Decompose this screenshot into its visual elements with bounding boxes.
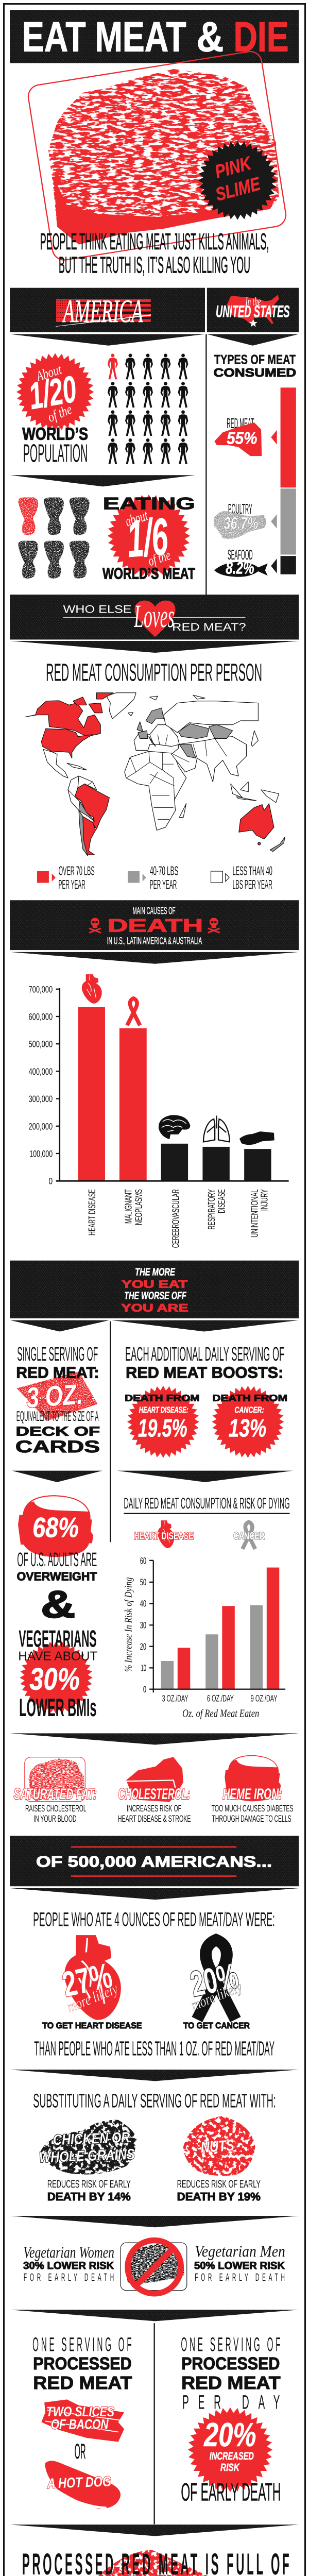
logo: US map	[216, 295, 290, 327]
icon: hot dog	[45, 2461, 121, 2509]
chart axes: 300,000	[28, 1094, 53, 1104]
icon: ribbon 20%: more likely	[188, 1978, 244, 2014]
icon: bacon: OF BACON	[51, 2417, 109, 2432]
icon: pink slime meat	[49, 2550, 263, 2576]
logo: US map: In the	[245, 295, 261, 308]
legend: heart disease: HEART DISEASE	[134, 1530, 194, 1541]
badge: 20% increased risk: INCREASED	[210, 2450, 254, 2462]
panel: reduces risk text	[47, 2178, 261, 2203]
icon: heart with script: Loves	[134, 598, 175, 634]
heading: OF 500,000 AMERICANS...	[36, 1853, 272, 1870]
badge: 30% lower BMIs	[18, 1625, 105, 1722]
axis labels: 9 OZ./DAY	[251, 1693, 277, 1703]
chart axes: 400,000	[28, 1066, 53, 1077]
panel: reduces risk text: DEATH BY 19%	[177, 2190, 261, 2203]
text: SINGLE SERVING OF	[17, 1343, 98, 1365]
item: heme iron	[212, 1756, 293, 1824]
item: chicken or whole grains: WHOLE GRAINS	[39, 2146, 135, 2165]
legend: cancer: CANCER	[233, 1530, 265, 1541]
icon: burger with 68%	[18, 1496, 93, 1557]
icon: heart 27%	[42, 1935, 142, 2030]
legend: PER YEAR	[59, 877, 85, 891]
icon grid: drumsticks, 1 in 6 highlighted	[18, 497, 90, 579]
heading: death with skulls	[89, 915, 220, 936]
icon: ribbon 20%: TO GET CANCER	[183, 2021, 250, 2030]
item: cholesterol: INCREASES RISK OF	[127, 1803, 181, 1814]
badge: eating 1/6 of the world's meat	[102, 481, 203, 584]
item: nuts	[183, 2116, 255, 2176]
badge: 30% lower BMIs: HAVE ABOUT	[18, 1649, 97, 1663]
title: DIE	[233, 13, 289, 60]
item: cholesterol	[118, 1757, 191, 1824]
logo: america flag script	[56, 293, 151, 329]
text: OF U.S. ADULTS ARE	[17, 1549, 97, 1571]
text: vegetarian women: 30% LOWER RISK	[23, 2260, 114, 2272]
bars	[161, 1568, 279, 1689]
heading	[121, 1266, 188, 1314]
axis labels: INJURY	[259, 1189, 270, 1211]
axis labels: RESPIRATORY	[206, 1189, 217, 1230]
badge: pink slime starburst: SLIME	[213, 173, 263, 205]
panel: processed red meat per day 20%: PROCESSED	[181, 2354, 280, 2373]
item: saturated fat	[14, 1757, 97, 1824]
text: vegetarian men	[194, 2242, 285, 2283]
icon: brain	[159, 1115, 190, 1139]
axis labels: NEOPLASMS	[133, 1189, 144, 1225]
logo: america flag script: AMERICA	[62, 293, 143, 329]
arrow	[10, 952, 299, 964]
badge: 1/20 of the world's population: About	[33, 361, 64, 384]
badge: heart disease 19.5%: 19.5%	[138, 1414, 187, 1442]
arrow	[10, 641, 299, 653]
icon: ribbon 20%	[183, 1940, 250, 2030]
badge: eating 1/6 of the world's meat: 1/6	[125, 507, 170, 568]
arrow	[10, 334, 205, 346]
badge: 1/20 of the world's population: POPULATION	[23, 439, 88, 467]
axis labels: Oz. of Red Meat Eaten	[182, 1707, 259, 1719]
heading: CONSUMED	[213, 366, 296, 379]
arrow	[10, 2310, 299, 2321]
arrows	[10, 1320, 299, 1331]
panel: single serving deck of cards: CARDS	[15, 1437, 100, 1456]
text: vegetarian men: 50% LOWER RISK	[194, 2260, 285, 2272]
chart axes: 200,000	[28, 1121, 53, 1131]
text: vegetarian women	[23, 2243, 114, 2283]
title: EAT MEAT	[22, 13, 186, 60]
icon: deck of cards	[16, 1364, 99, 1421]
text: vegetarian men: FOR EARLY DEATH	[195, 2272, 285, 2283]
panel: processed red meat per day 20%	[181, 2333, 286, 2506]
legend: OVER 70 LBS	[59, 863, 95, 878]
panel: nutrients	[10, 1733, 299, 1824]
icon: ground meat	[48, 69, 279, 245]
panel: hero meat tray	[27, 50, 289, 278]
panel: title banner	[10, 10, 299, 63]
panel: daily red meat consumption and risk of dying chart	[123, 1495, 290, 1719]
arrow	[207, 334, 299, 346]
text: vegetarian women: Vegetarian Women	[23, 2243, 114, 2261]
legend: 40-70 LBS	[150, 863, 178, 878]
panel: reduces risk text: REDUCES RISK OF EARLY	[47, 2178, 131, 2190]
label: poultry 36.7%: 36.7%	[224, 514, 258, 533]
panel: world map of red meat consumption	[10, 641, 299, 891]
label: seafood 8.2%: SEAFOOD	[228, 547, 253, 563]
badge: eating 1/6 of the world's meat: of the	[146, 547, 173, 569]
badge: cancer 13%	[212, 1374, 296, 1464]
item: cholesterol: CHOLESTEROL:	[118, 1785, 190, 1802]
badge: heart disease 19.5%: HEART DISEASE:	[139, 1405, 188, 1415]
badge: 20% increased risk: RISK	[220, 2462, 240, 2473]
icon: no meat sign	[121, 2240, 187, 2294]
icon: heart	[82, 974, 102, 1004]
panel: who else loves red meat banner: WHO ELSE	[63, 603, 132, 615]
title: &	[197, 13, 224, 60]
panel: vegetarian risk	[10, 2216, 299, 2524]
panel: main causes of death banner	[10, 900, 299, 950]
badge: 1/20 of the world's population: of the	[45, 401, 74, 425]
legend: cancer	[233, 1522, 265, 1549]
legend: heart disease	[134, 1520, 194, 1548]
heading: THE MORE	[135, 1266, 175, 1278]
panel: main causes of death banner: IN U.S., LATIN AMERICA & AUSTRALIA	[107, 935, 202, 946]
panel: of 500,000 americans banner	[10, 1836, 299, 2176]
axis labels: UNINTENTIONAL	[249, 1189, 260, 1238]
arrow	[10, 475, 195, 486]
heading: THE WORSE OFF	[124, 1290, 186, 1301]
icon: deck of cards: 3 OZ.	[25, 1378, 83, 1414]
map	[26, 693, 285, 856]
panel: one serving of processed red meat examples: ONE SERVING OF	[32, 2333, 132, 2355]
panel: each additional daily serving	[12, 1343, 296, 1482]
badge: 1/20 of the world's population: 1/20	[26, 368, 79, 417]
stacked bar chart	[271, 387, 296, 574]
badge: eating 1/6 of the world's meat: about	[123, 507, 150, 530]
arrows	[12, 1471, 293, 1482]
icon grid: people, 1 in 20 highlighted	[108, 353, 188, 464]
icon: deck of cards: RED MEAT:	[16, 1364, 99, 1381]
text: vegetarian men: Vegetarian Men	[195, 2242, 285, 2260]
panel: single serving deck of cards	[15, 1343, 100, 1456]
arrow	[10, 2524, 299, 2536]
item: chicken or whole grains	[39, 2120, 137, 2175]
panel: one serving of processed red meat examples: OR	[75, 2439, 85, 2463]
label: seafood 8.2%	[214, 547, 268, 578]
badge: 20% increased risk	[182, 2391, 286, 2499]
arrow	[10, 2070, 299, 2081]
icon: bacon: TWO SLICES	[46, 2404, 114, 2419]
panel: main causes of death banner: MAIN CAUSES OF	[133, 905, 176, 916]
icon: ribbon 20%: 20%	[187, 1956, 242, 2004]
chart axes	[28, 984, 289, 1186]
label: seafood 8.2%: 8.2%	[226, 558, 254, 578]
badge: 1/20 of the world's population	[16, 341, 107, 467]
item: chicken or whole grains: CHICKEN OR	[53, 2129, 130, 2148]
panel: overweight and vegetarians: OVERWEIGHT	[17, 1570, 97, 1583]
panel: one serving of processed red meat examples	[32, 2333, 132, 2509]
icon: lungs	[203, 1115, 230, 1142]
icon: burger with 68%: 68%	[32, 1512, 79, 1543]
label: red meat 55%: 55%	[227, 429, 257, 448]
bars	[78, 1007, 271, 1180]
panel: types of meat consumed in the united states	[205, 288, 299, 595]
intro text	[40, 229, 269, 278]
panel: who else loves red meat banner	[10, 595, 299, 639]
icon: car	[239, 1131, 274, 1145]
heading	[213, 352, 296, 379]
chart axes: 100,000	[29, 1148, 53, 1159]
panel: reduces risk text: REDUCES RISK OF EARLY	[177, 2178, 261, 2190]
item: saturated fat: IN YOUR BLOOD	[33, 1813, 76, 1824]
badge: 30% lower BMIs: VEGETARIANS	[19, 1625, 97, 1652]
badge: pink slime starburst	[198, 128, 289, 226]
badge: pink slime starburst: PINK	[213, 152, 254, 182]
icon: heart 27%: more likely	[64, 1980, 120, 2015]
chart axes: 40	[140, 1598, 146, 1609]
panel: overweight and vegetarians	[17, 1496, 105, 1722]
badge: cancer 13%: 13%	[229, 1414, 266, 1442]
item: saturated fat: RAISES CHOLESTEROL	[25, 1803, 87, 1814]
icon: heart 27%: TO GET HEART DISEASE	[42, 2021, 142, 2030]
panel: processed red meat per day 20%: RED MEAT	[181, 2373, 281, 2393]
chart axes	[140, 1555, 285, 1694]
legend: PER YEAR	[150, 877, 177, 891]
arrow	[10, 1733, 299, 1745]
badge: eating 1/6 of the world's meat: EATING	[103, 494, 195, 513]
panel: types of meat consumed in the united states: RED MEAT	[227, 416, 254, 431]
item: saturated fat: SATURATED FAT:	[14, 1785, 97, 1802]
axis labels: CEREBROVASCULAR	[170, 1189, 181, 1248]
panel: one serving of processed red meat examples: RED MEAT	[33, 2373, 132, 2393]
axis labels: HEART DISEASE	[87, 1189, 97, 1235]
chart axes: 20	[140, 1641, 146, 1652]
chart axes: 10	[141, 1663, 146, 1673]
badge: cancer 13%: DEATH FROM	[213, 1393, 287, 1403]
axis labels: 6 OZ./DAY	[207, 1693, 234, 1703]
panel: one serving of processed red meat examples: PROCESSED	[33, 2354, 132, 2373]
panel: pink slime	[10, 2524, 299, 2576]
label: poultry 36.7%: POULTRY	[228, 501, 252, 517]
badge: heart disease 19.5%	[125, 1374, 211, 1464]
panel: who else loves red meat banner: RED MEAT?	[172, 621, 246, 633]
icon: bacon	[41, 2399, 124, 2442]
chart axes: 600,000	[28, 1011, 53, 1022]
chart axes: 30	[140, 1620, 146, 1630]
badge: heart disease 19.5%: DEATH FROM	[125, 1393, 200, 1403]
text: EQUIVALENT TO THE SIZE OF A	[16, 1409, 98, 1424]
panel: overweight and vegetarians: &	[41, 1583, 75, 1626]
panel: processed red meat per day 20%: ONE SERVING OF	[181, 2333, 281, 2355]
badge: eating 1/6 of the world's meat: WORLD’S MEAT	[102, 565, 195, 582]
heading: YOU ARE	[121, 1301, 188, 1314]
icon: hot dog: A HOT DOG	[47, 2473, 112, 2492]
chart axes: 0	[143, 1684, 146, 1694]
axis labels: MALIGNANT	[123, 1189, 134, 1224]
axis labels: % Increase In Risk of Dying	[123, 1577, 134, 1672]
arrow	[10, 2216, 299, 2227]
label: poultry 36.7%	[214, 501, 266, 539]
axis labels: 3 OZ./DAY	[162, 1693, 188, 1703]
axis labels	[123, 1577, 277, 1719]
chart axes: 0	[49, 1176, 53, 1186]
icon: heart with script	[134, 598, 176, 637]
text: vegetarian women: FOR EARLY DEATH	[24, 2272, 114, 2283]
axis labels: DISEASE	[216, 1189, 227, 1213]
chart axes: 50	[140, 1577, 146, 1587]
badge: 20% increased risk: 20%	[203, 2416, 256, 2453]
badge: 30% lower BMIs: 30%	[29, 1662, 80, 1696]
chart axes: 60	[140, 1555, 146, 1566]
panel: causes of death bar chart	[10, 952, 299, 1248]
chart axes: 700,000	[28, 984, 53, 994]
icon: ribbon	[127, 998, 140, 1025]
badge: cancer 13%: CANCER:	[234, 1405, 264, 1415]
axis labels	[87, 1189, 270, 1248]
item: nuts: NUTS	[200, 2137, 235, 2156]
panel: reduces risk text: DEATH BY 14%	[47, 2190, 131, 2203]
badge: 20% increased risk: PER DAY	[182, 2391, 280, 2413]
legend	[37, 863, 272, 891]
chart axes: 500,000	[28, 1039, 53, 1049]
heading: YOU EAT	[122, 1278, 187, 1290]
panel: single serving deck of cards: DECK OF	[16, 1424, 100, 1438]
item: cholesterol: HEART DISEASE & STROKE	[118, 1813, 191, 1824]
panel: each additional daily serving: RED MEAT BOOSTS:	[126, 1364, 283, 1381]
arrow	[10, 1888, 299, 1900]
label: red meat 55%	[214, 416, 262, 456]
icon: heart 27%: 27%	[59, 1955, 115, 2005]
badge: 1/20 of the world's population: WORLD’S	[22, 424, 88, 444]
heading: death with skulls: DEATH	[108, 915, 203, 936]
badge: 30% lower BMIs: LOWER BMIs	[19, 1693, 97, 1722]
panel: america vs world	[10, 288, 205, 584]
panel: the more you eat banner	[10, 1261, 299, 1542]
